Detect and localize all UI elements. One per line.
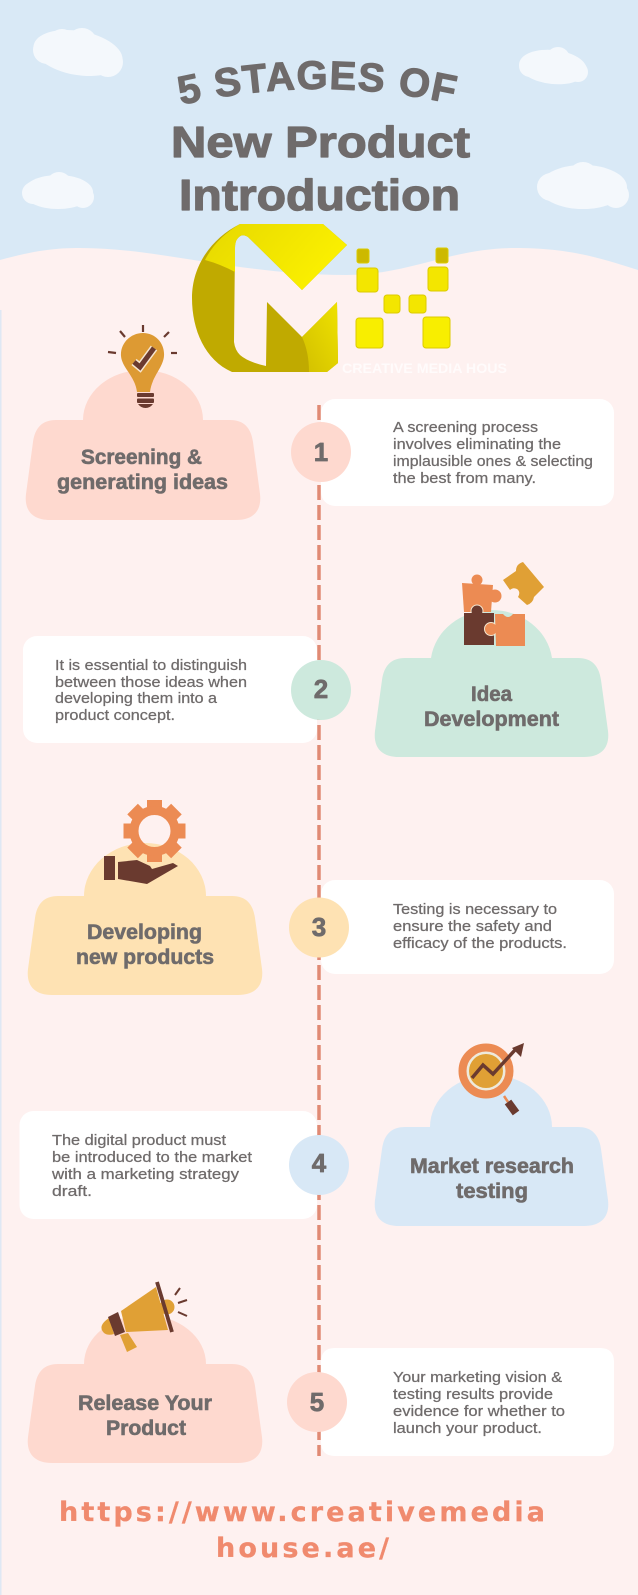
- stage 3 panel: developing new products: [28, 800, 262, 995]
- stage 3 blob: [28, 843, 262, 995]
- stage 4 number badge: [289, 1135, 349, 1195]
- stage 2 heading: Development: [424, 708, 559, 731]
- stage 3 description card: [321, 880, 614, 974]
- left edge strip: [0, 310, 2, 1595]
- stage 2 description card: It is essential to distinguish: [55, 658, 247, 674]
- stage 5 heading: Release Your: [78, 1392, 212, 1415]
- stage 5 description card: [321, 1348, 614, 1456]
- stage 2 description card: developing them into a: [55, 691, 218, 707]
- stage 5 description card: Your marketing vision &: [393, 1370, 562, 1386]
- cloud: middle left: [22, 172, 94, 209]
- stage 5 heading: [78, 1392, 212, 1440]
- website url: https://www.creativemedia: [59, 1497, 545, 1528]
- stage 2 blob: [375, 610, 608, 757]
- stage 1 description card: involves eliminating the: [393, 437, 561, 453]
- stage 5 blob: [28, 1315, 262, 1463]
- title: New Product: [171, 118, 470, 167]
- stage 4 description card: be introduced to the market: [52, 1150, 252, 1166]
- stage 2 heading: Idea: [471, 683, 512, 706]
- cloud: top right: [517, 47, 589, 87]
- stage 3 heading: [76, 921, 214, 969]
- stage 4 number badge: 4: [312, 1148, 327, 1178]
- stage 3 number badge: 3: [312, 912, 326, 942]
- stage 3 description card: Testing is necessary to: [393, 902, 557, 918]
- stage 4 description card: with a marketing strategy: [51, 1167, 240, 1183]
- icon: magnifier with rising arrow: [462, 1043, 524, 1113]
- cloud: top left: [30, 24, 126, 82]
- stage 3 description card: ensure the safety and: [393, 919, 552, 935]
- stage 1 description card: [321, 399, 614, 506]
- stage 4 panel: market research testing: [375, 1043, 608, 1226]
- title: [171, 60, 470, 220]
- stage 1 panel: screening: [26, 325, 260, 520]
- stage 1 description card: the best from many.: [393, 471, 536, 487]
- icon: megaphone: [101, 1282, 187, 1352]
- stage 1 blob: [26, 370, 260, 520]
- icon: puzzle pieces: [462, 562, 544, 646]
- stage 4 blob: [375, 1075, 608, 1226]
- stage 2 heading: [424, 683, 559, 731]
- stage 2 description card: [23, 636, 317, 743]
- title: Introduction: [179, 171, 460, 220]
- stage 1 description card: implausible ones & selecting: [393, 454, 593, 470]
- title line: 5 stages of: 5 STAGES OF: [178, 60, 458, 104]
- stage 4 heading: testing: [456, 1180, 528, 1203]
- logo wordmark: CREATIVE MEDIA HOUS: [342, 360, 507, 376]
- stage 2 description card: between those ideas when: [55, 675, 247, 691]
- puzzle piece: bottom orange: [484, 614, 525, 646]
- stage 5 panel: release your product: [28, 1282, 262, 1463]
- website url: [59, 1497, 545, 1564]
- stage 3 description card: efficacy of the products.: [393, 936, 567, 952]
- stage 1 number badge: 1: [314, 437, 328, 467]
- stage 5 description card: evidence for whether to: [393, 1404, 565, 1420]
- sky background: [0, 0, 638, 300]
- stage 5 description card: testing results provide: [393, 1387, 553, 1403]
- stage 4 description card: draft.: [52, 1184, 92, 1200]
- stage 5 description card: launch your product.: [393, 1421, 542, 1437]
- stage 1 heading: [57, 446, 228, 494]
- stage 4 heading: [410, 1155, 574, 1203]
- logo: Creative Media House: [192, 224, 507, 376]
- stage 3 heading: Developing: [87, 921, 202, 944]
- puzzle piece: yellow: [503, 562, 544, 605]
- stage 1 heading: generating ideas: [57, 471, 228, 494]
- stage 4 heading: Market research: [410, 1155, 574, 1178]
- stage 5 number badge: 5: [310, 1387, 324, 1417]
- stage 3 number badge: [289, 898, 349, 958]
- stage 5 heading: Product: [106, 1417, 186, 1440]
- puzzle piece: brown: [464, 605, 494, 645]
- icon: light bulb: [108, 325, 177, 408]
- stage 2 number badge: 2: [314, 674, 328, 704]
- dashed timeline: [317, 405, 321, 1456]
- stage 2 panel: idea development: [375, 562, 608, 757]
- stage 4 description card: The digital product must: [52, 1133, 226, 1149]
- stage 2 number badge: [291, 660, 351, 720]
- stage 4 description card: [20, 1111, 317, 1219]
- puzzle piece: top orange: [462, 574, 502, 612]
- stage 1 description card: A screening process: [393, 420, 538, 436]
- cloud: middle right: [537, 162, 629, 209]
- stage 5 number badge: [287, 1372, 347, 1432]
- stage 1 heading: Screening &: [81, 446, 202, 469]
- stage 3 heading: new products: [76, 946, 214, 969]
- stage 2 description card: product concept.: [55, 708, 175, 724]
- website url: house.ae/: [216, 1533, 389, 1564]
- icon: gear over hand: [104, 800, 186, 884]
- stage 1 number badge: [291, 422, 351, 482]
